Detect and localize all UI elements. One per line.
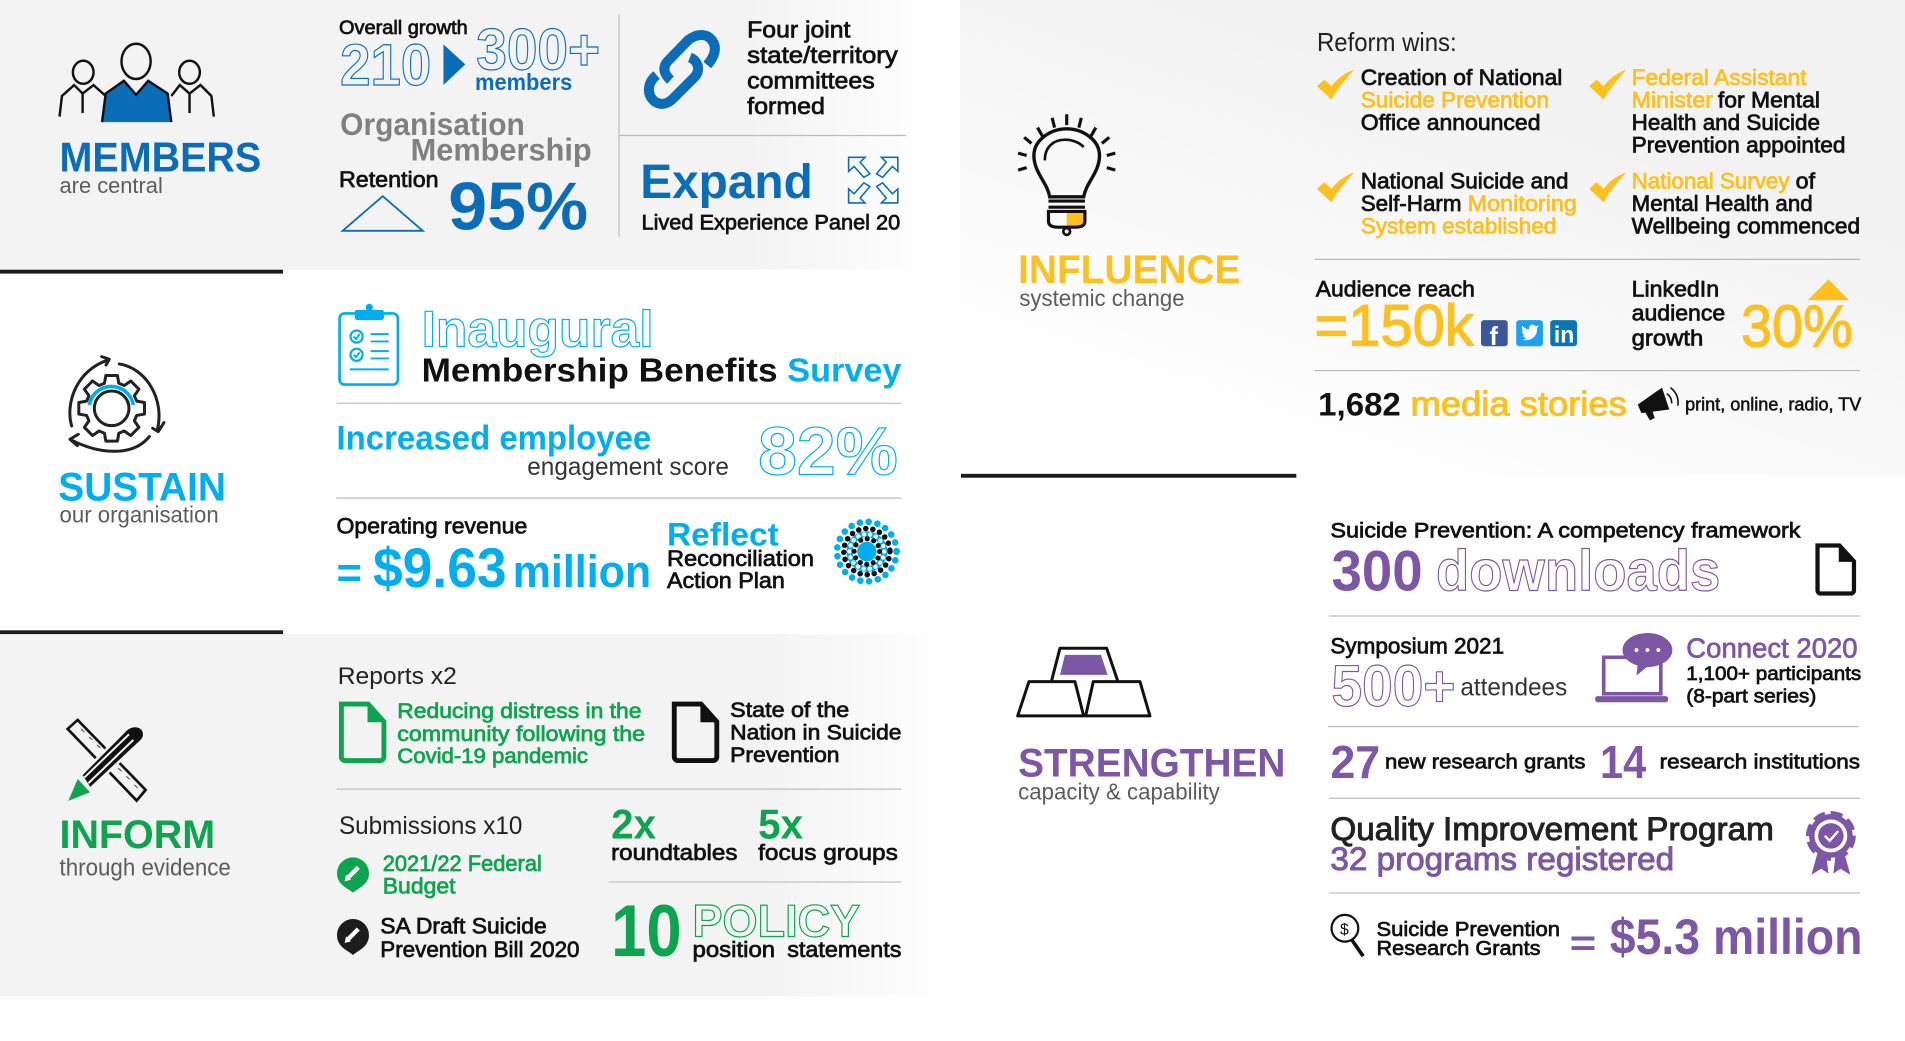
icon: check marks: [1317, 70, 1626, 202]
heading: influence: INFLUENCE: [1018, 248, 1240, 292]
stat: audience reach: =150k: [1315, 294, 1475, 359]
stat: roundtables: 2x: [611, 801, 656, 847]
stat: policy position statements: 10: [611, 891, 682, 972]
subheading: are central: are central: [60, 173, 163, 198]
stat: policy position statements: statements: [787, 937, 902, 962]
text: connect 2020: [1686, 632, 1862, 707]
stat: focus groups: [758, 801, 898, 865]
text: monitoring system win: System established: [1361, 213, 1556, 238]
icon: black pencil pin: [337, 919, 369, 955]
stat: operating revenue: $9.63: [373, 536, 507, 599]
stat: symposium attendees: [1330, 634, 1567, 719]
text: four joint committees: [747, 17, 898, 119]
stat: employee engagement: engagement score: [527, 453, 729, 481]
text: reflect reconciliation action plan: Action Plan: [667, 568, 785, 593]
text: national survey win: [1632, 168, 1860, 238]
text: federal assistant minister win: Prevention appointed: [1632, 132, 1845, 157]
stat: symposium attendees: 500+: [1332, 654, 1455, 719]
icon: green document: [341, 703, 384, 761]
text: national survey win: of: [1796, 168, 1816, 193]
stat: organisation membership retention: Retention: [339, 167, 439, 192]
subheading: systemic change: systemic change: [1019, 285, 1185, 311]
stat: media stories: media stories: [1411, 386, 1627, 424]
text: monitoring system win: National Suicide and: [1361, 168, 1568, 193]
icon: magnifier with dollar: [1332, 915, 1363, 956]
stat: operating revenue: =: [337, 550, 362, 596]
text: SA draft bill submission: SA Draft Suicide: [380, 914, 547, 939]
text: connect 2020: Connect 2020: [1686, 632, 1858, 663]
stat: linkedin growth: 30%: [1741, 292, 1853, 359]
stat: linkedin growth: LinkedIn: [1632, 276, 1719, 301]
stat: audience reach: Audience reach: [1316, 276, 1475, 301]
stat: operating revenue: million: [513, 546, 651, 597]
text: reducing distress report: [397, 699, 645, 768]
text: federal budget submission: 2021/22 Federal: [383, 851, 542, 876]
text: monitoring system win: [1361, 168, 1577, 238]
stat: overall growth: 210: [340, 33, 431, 98]
stat: quality improvement program: Quality Improvement Program: [1330, 810, 1774, 847]
heading: strengthen: STRENGTHEN: [1018, 741, 1285, 785]
icon: document: [1818, 546, 1854, 594]
icon: chain link: [649, 35, 715, 104]
stat: linkedin growth: growth: [1632, 326, 1703, 351]
text: suicide prevention office win: Suicide Prevention: [1361, 88, 1549, 113]
stat: symposium attendees: attendees: [1460, 674, 1567, 702]
text: reducing distress report: Covid-19 pandemic: [397, 744, 588, 768]
text: federal budget submission: Budget: [383, 874, 456, 899]
stat: policy position statements: POLICY: [693, 896, 860, 947]
stat: operating revenue: Operating revenue: [337, 513, 527, 538]
icon: members people: [60, 44, 214, 122]
text: four joint committees: committees: [747, 68, 875, 94]
icon: social media: in: [1554, 322, 1574, 348]
stat: media stories: 1,682: [1318, 386, 1401, 423]
text: reducing distress report: Reducing distress in the: [397, 699, 641, 723]
text: reflect reconciliation action plan: [667, 516, 814, 593]
stat: overall growth: 300+: [476, 17, 600, 82]
stat: linkedin growth: [1632, 276, 1853, 359]
text: federal assistant minister win: for Mental: [1718, 88, 1820, 113]
icon: ruler and pencil: [68, 720, 146, 801]
text: suicide prevention office win: [1361, 65, 1562, 135]
text: four joint committees: formed: [747, 93, 825, 119]
text: reflect reconciliation action plan: Reconciliation: [667, 546, 814, 571]
text: four joint committees: state/territory: [747, 42, 898, 68]
text: state of the nation report: Prevention: [730, 743, 840, 767]
icon: green pencil pin: [337, 857, 369, 893]
stat: quality improvement program: [1330, 810, 1774, 877]
icon: rosette award: [1809, 814, 1853, 875]
stat: overall growth: members: [475, 69, 572, 95]
stat: research grants and institutions: [1330, 736, 1860, 788]
text: state of the nation report: State of the: [730, 698, 849, 722]
text: lived experience panel: Lived Experience Panel 20: [641, 211, 900, 235]
text: federal assistant minister win: Health and Suicide: [1632, 110, 1820, 135]
stat: focus groups: 5x: [758, 801, 803, 847]
heading: members: MEMBERS: [60, 134, 261, 180]
stat: media stories: [1318, 386, 1627, 424]
stat: organisation membership retention: Organisation: [340, 106, 525, 142]
text: suicide prevention research grants: Suicide Prevention: [1377, 918, 1560, 941]
stat: research grants and institutions: 14: [1600, 736, 1647, 788]
stat: overall growth: Overall growth: [339, 17, 468, 39]
text: national survey win: National Survey: [1632, 168, 1790, 193]
stat: organisation membership retention: [339, 106, 592, 245]
stat: employee engagement: 82%: [758, 413, 898, 489]
text: reform wins: Reform wins:: [1317, 29, 1457, 57]
text: monitoring system win: Self-Harm: [1361, 191, 1462, 216]
text: federal assistant minister win: [1632, 65, 1845, 157]
heading: expand: Expand: [640, 155, 813, 209]
stat: roundtables: [611, 801, 738, 865]
stat: symposium attendees: Symposium 2021: [1330, 634, 1504, 659]
stat: organisation membership retention: 95%: [448, 169, 588, 245]
icon: clipboard: [340, 304, 398, 385]
text: state of the nation report: [730, 698, 901, 767]
stat: roundtables: roundtables: [611, 840, 738, 865]
heading: inaugural membership benefits survey: Inaugural: [422, 300, 654, 357]
icon: gold bars: [1018, 648, 1150, 716]
text: suicide prevention research grants: Research Grants: [1377, 937, 1541, 960]
stat: research grants and institutions: 27: [1330, 736, 1380, 788]
stat: organisation membership retention: Membership: [411, 131, 592, 167]
text: national survey win: Mental Health and: [1632, 191, 1813, 216]
icon: gear with cycle arrows: [70, 357, 164, 451]
text: federal budget submission: [383, 851, 542, 899]
text: suicide prevention office win: Office announced: [1361, 110, 1541, 135]
stat: linkedin growth: audience: [1632, 301, 1725, 326]
text: SA draft bill submission: Prevention Bill 2020: [380, 937, 580, 962]
icon: reconciliation dot circle: [837, 522, 897, 581]
text: state of the nation report: Nation in Suicide: [730, 720, 901, 744]
text: monitoring system win: Monitoring: [1468, 191, 1577, 216]
subheading: our organisation: our organisation: [60, 501, 219, 527]
stat: employee engagement: Increased employee: [337, 420, 651, 458]
stat: research grants and institutions: new research grants: [1385, 750, 1585, 773]
icon: social media: [1481, 320, 1577, 351]
text: suicide prevention office win: Creation of National: [1361, 65, 1562, 90]
text: connect 2020: (8-part series): [1686, 685, 1816, 707]
heading: sustain: SUSTAIN: [58, 466, 226, 510]
text: suicide prevention research grants: [1377, 918, 1560, 960]
stat: policy position statements: [611, 891, 902, 972]
stat: competency framework downloads: [1330, 519, 1801, 603]
heading: inaugural membership benefits survey: Survey: [787, 353, 902, 390]
stat: research grants amount: =: [1570, 922, 1596, 963]
text: submissions x10: Submissions x10: [339, 812, 522, 840]
stat: quality improvement program: 32 programs registered: [1330, 840, 1674, 877]
stat: research grants amount: $5.3 million: [1610, 909, 1862, 965]
text: SA draft bill submission: [380, 914, 580, 962]
heading: inaugural membership benefits survey: Membership Benefits: [422, 353, 778, 390]
icon: light bulb: [1018, 114, 1115, 235]
stat: policy position statements: position: [693, 937, 775, 962]
text: reflect reconciliation action plan: Reflect: [667, 516, 779, 553]
text: reports x2: Reports x2: [338, 663, 457, 690]
panel: members: [0, 0, 935, 270]
subheading: capacity and capability: capacity & capability: [1018, 778, 1220, 804]
icon: expand arrows: [849, 157, 898, 203]
heading: inform: INFORM: [60, 813, 215, 857]
panel: influence: [960, 0, 1905, 476]
subheading: through evidence: through evidence: [60, 855, 231, 881]
panel: sustain: [58, 300, 902, 599]
icon: laptop with chat bubble: [1595, 633, 1672, 702]
stat: overall growth: [339, 17, 600, 98]
stat: focus groups: focus groups: [758, 840, 898, 865]
icon: megaphone: [1638, 388, 1678, 420]
stat: competency framework downloads: downloads: [1436, 539, 1720, 603]
stat: competency framework downloads: 300: [1332, 539, 1423, 603]
icon: social media: f: [1489, 323, 1498, 351]
text: national survey win: Wellbeing commenced: [1632, 213, 1860, 238]
text: four joint committees: Four joint: [747, 17, 851, 43]
panel: strengthen: [1018, 519, 1862, 965]
icon: black document: [674, 703, 717, 761]
text: media channels: print, online, radio, TV: [1685, 395, 1862, 415]
icon: magnifier with dollar: $: [1340, 921, 1349, 938]
stat: operating revenue: [337, 513, 651, 599]
text: federal assistant minister win: Minister: [1632, 88, 1713, 113]
text: reducing distress report: community following the: [397, 722, 645, 746]
text: federal assistant minister win: Federal Assistant: [1632, 65, 1807, 90]
stat: competency framework downloads: Suicide Prevention: A competency framework: [1330, 519, 1801, 543]
stat: employee engagement: [337, 413, 898, 489]
stat: research grants and institutions: research institutions: [1660, 750, 1860, 773]
heading: inaugural membership benefits survey: [422, 300, 902, 390]
panel: inform: [0, 634, 954, 996]
text: connect 2020: 1,100+ participants: [1686, 663, 1862, 685]
